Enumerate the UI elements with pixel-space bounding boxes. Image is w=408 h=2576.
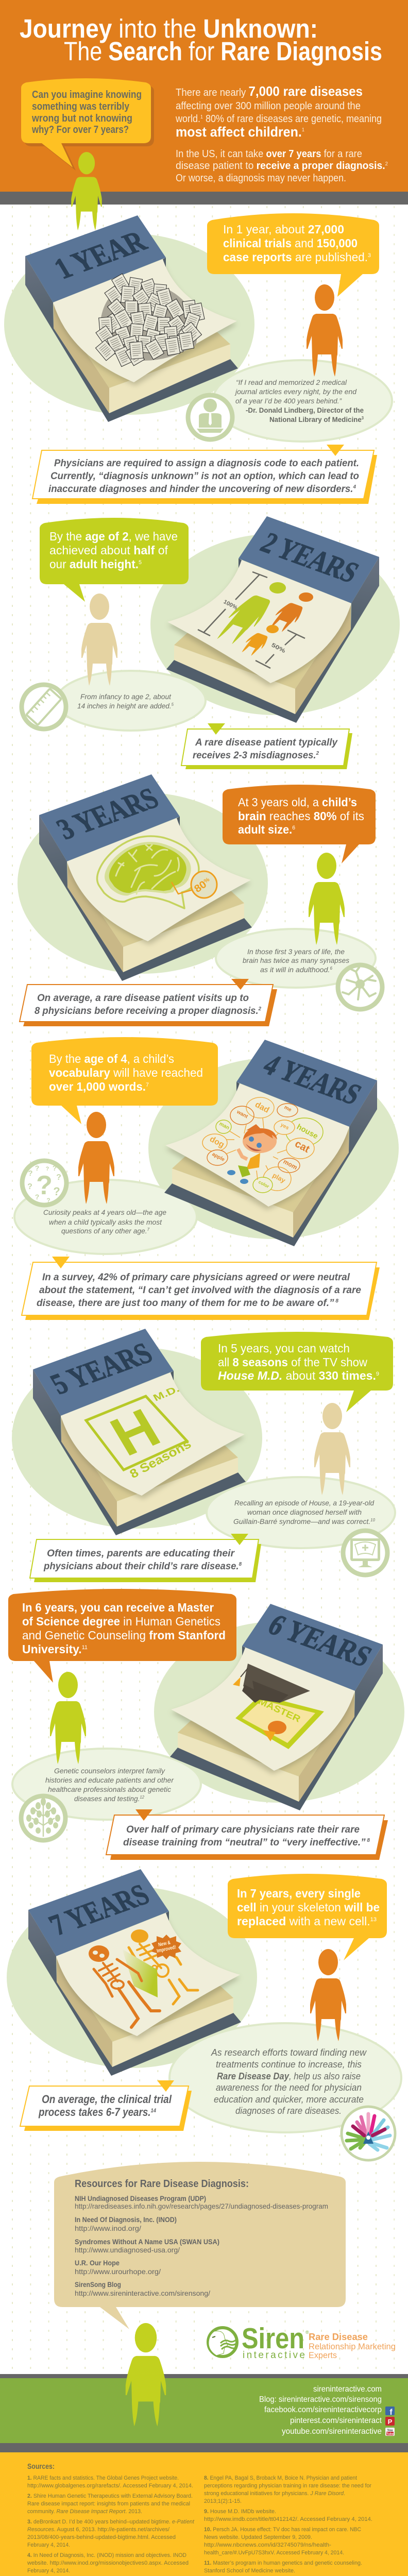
- statement: survey: 8: [334, 1298, 338, 1304]
- speech bubble: clinical trials: case reports are published.: [223, 250, 370, 264]
- statement: rare disease training: [106, 1809, 388, 1860]
- intro speech bubble: something was terribly: [32, 101, 130, 112]
- logo: Siren Interactive: Siren: [242, 2322, 304, 2355]
- footer links: Blog: sireninteractive.com/sirensong: [259, 2395, 382, 2404]
- icon: siren face: [208, 2328, 237, 2357]
- statement: survey: In a survey, 42% of primary care physicians agreed or were neutral: [42, 1272, 350, 1283]
- measure bar: 100%: [198, 572, 305, 668]
- statement: diagnosis code: [32, 445, 377, 504]
- chart: adult vs child height: [198, 572, 313, 668]
- source list: left column: 2. Shire Human Genetic Therapeutics with External Advisory Board.: [27, 2493, 193, 2499]
- source list: right column: 10. Persch JA. House effect: TV doc has real impact on care. NBC: [204, 2527, 361, 2533]
- speech bubble: brain size: brain reaches 80% of its: [238, 809, 364, 823]
- icon: question marks: ?: [53, 1185, 60, 1198]
- circle backdrop: [12, 1347, 262, 1529]
- adult figure: orange: [266, 592, 313, 634]
- statement: rare disease training: 8: [366, 1838, 370, 1843]
- speech bubble: House M.D.: all 8 seasons of the TV show: [218, 1355, 367, 1369]
- icon: House M.D. logo: 8 Seasons: [128, 1437, 194, 1481]
- icon: youtube: You: [387, 2429, 393, 2432]
- callout: Lindberg quote: National Library of Medicine: [269, 415, 366, 423]
- speech bubble: adult height: achieved about half of: [49, 544, 168, 557]
- callout: Rare Disease Day: diagnoses of rare diseases.: [235, 2106, 342, 2116]
- title: The Search for Rare Diagnosis: [64, 37, 382, 66]
- icon: question marks: ?: [36, 1171, 53, 1200]
- section: 7 years: [7, 1869, 401, 2160]
- callout: height gained: 5: [172, 702, 174, 707]
- speech bubble: master of science: 11: [82, 1645, 88, 1651]
- source list: left column: February 4, 2014.: [27, 2568, 70, 2574]
- speech bubble: clinical trials: [207, 213, 379, 297]
- panel: resources: [54, 2162, 346, 2329]
- callout: Lindberg quote: -Dr. Donald Lindberg, Director of the: [246, 406, 364, 414]
- callout: genetic counselors: Genetic counselors interpret family: [54, 1767, 165, 1775]
- callout: curiosity: questions of any other age.: [61, 1227, 148, 1235]
- panel: resources: http://www.sireninteractive.com/sirensong/: [75, 2289, 210, 2297]
- calendar: 1 year: 1 YEAR: [48, 225, 152, 285]
- section: 5 years: [12, 1329, 395, 1582]
- panel: sources: Sources:: [27, 2462, 55, 2471]
- title: Journey into the Unknown:: [20, 14, 318, 43]
- child figure: amber: [239, 625, 279, 657]
- intro statistics text: 80% of rare diseases are genetic, meaning: [203, 113, 382, 125]
- icon: pinterest: P: [388, 2418, 393, 2426]
- callout: House episode: Recalling an episode of House, a 19-year-old: [234, 1499, 375, 1507]
- footer links: [259, 2385, 382, 2436]
- statement: 8 physicians: [20, 979, 277, 1026]
- panel: resources: Syndromes Without A Name USA (SWAN USA): [75, 2238, 219, 2246]
- callout: Lindberg quote: 3: [362, 416, 364, 420]
- statement: parents educating: 8: [239, 1562, 242, 1567]
- statement: parents educating: Often times, parents are educating their: [47, 1548, 235, 1559]
- callout: Rare Disease Day: treatments continue to increase, this: [216, 2059, 362, 2070]
- circle backdrop: [154, 1621, 404, 1803]
- source list: right column: 11. Master’s program in human genetics and genetic counseling.: [204, 2560, 362, 2566]
- skeleton: yellow new and improved: [129, 1929, 198, 2004]
- icon: child with word bubbles: yes: [280, 1122, 290, 1131]
- source list: right column: health_care/#.UvFpU7S3hxV. Accessed February 4, 2014.: [204, 2550, 344, 2556]
- source list: left column: website. http://www.inod.org/missionobjectives0.aspx. Accessed: [27, 2560, 189, 2566]
- callout: genetic counselors: [12, 1749, 201, 1820]
- chart: adult vs child height: 50%: [270, 642, 286, 654]
- speech bubble: master of science: In 6 years, you can receive a Master: [22, 1601, 214, 1614]
- figure: lime person: [50, 1672, 86, 1764]
- icon: child with word bubbles: man: [218, 1121, 230, 1131]
- speech bubble: House M.D.: [201, 1332, 393, 1412]
- speech bubble: vocabulary: 7: [146, 1082, 149, 1088]
- figure: lime person: [309, 853, 345, 945]
- statement: rare disease training: Over half of primary care physicians rate their rare: [126, 1824, 360, 1835]
- intro speech bubble: why? For over 7 years?: [31, 124, 129, 135]
- callout: genetic counselors: 12: [140, 1795, 145, 1800]
- callout: Rare Disease Day: education and quicker, more accurate: [214, 2094, 364, 2105]
- calendar: 1 year: [25, 215, 238, 422]
- footer links: pinterest.com/sireninteract: [290, 2416, 382, 2425]
- intro statistics text: Or worse, a diagnosis may never happen.: [176, 173, 346, 184]
- callout: curiosity: 7: [147, 1227, 150, 1232]
- source list: right column: 2013;1(2):1-15.: [204, 2498, 242, 2504]
- icon: child with word bubbles: play: [271, 1171, 287, 1184]
- intro statistics text: world.: [176, 113, 203, 125]
- source list: right column: [203, 2475, 372, 2576]
- panel: resources: http://rarediseases.info.nih.gov/research/pages/27/undiagnosed-diseases-program: [75, 2202, 328, 2210]
- calendar: 7 years: [28, 1869, 241, 2076]
- source list: left column: Resources. August 6, 2013. http://e-patients.net/archives/: [27, 2527, 169, 2533]
- callout: curiosity: Curiosity peaks at 4 years old—the age: [43, 1208, 166, 1216]
- statement: diagnosis code: Physicians are required to assign a diagnosis code to each patient.: [54, 458, 359, 469]
- callout: Rare Disease Day: awareness for the need for physician: [216, 2082, 362, 2093]
- speech bubble: skeleton cells: In 7 years, every single: [237, 1887, 361, 1900]
- header divider band: [0, 192, 408, 205]
- source list: left column: 2013/08/400-years-behind-updated-bigtime.html. Accessed: [27, 2534, 176, 2540]
- icon: neuron: [338, 965, 382, 1009]
- intro statistics text: 1: [302, 127, 304, 133]
- footer links: facebook.com/sireninteractivecorp: [264, 2405, 382, 2414]
- footer links: sireninteractive.com: [313, 2385, 382, 2394]
- footer links: youtube.com/sireninteractive: [282, 2427, 382, 2436]
- icon: child with word bubbles: dog: [208, 1135, 226, 1149]
- icon: child with word bubbles: [202, 1097, 323, 1193]
- callout: curiosity: [14, 1180, 197, 1254]
- panel: resources: http://www.urourhope.org/: [75, 2267, 161, 2276]
- callout: Rare Disease Day: As research efforts toward finding new: [211, 2047, 367, 2058]
- panel: resources: In Need Of Diagnosis, Inc. (INOD): [75, 2215, 177, 2224]
- callout: synapses: as it will in adulthood.: [260, 965, 329, 974]
- icon: House M.D. logo: [86, 1384, 194, 1481]
- intro speech bubble: Can you imagine knowing: [32, 89, 142, 100]
- calendar: 7 years: 7 YEARS: [43, 1878, 155, 1941]
- title: [20, 14, 382, 66]
- callout: synapses: 6: [330, 966, 333, 971]
- speech bubble: master of science: and Genetic Counseling from Stanford: [22, 1629, 226, 1642]
- panel: resources: U.R. Our Hope: [75, 2259, 120, 2267]
- speech bubble: clinical trials: 3: [368, 252, 371, 259]
- icon: pinterest: [385, 2417, 395, 2426]
- statement: 8 physicians: 2: [258, 1006, 261, 1012]
- speech bubble: brain size: 6: [292, 825, 295, 831]
- speech bubble: House M.D.: 9: [376, 1371, 379, 1377]
- icon: facebook: f: [389, 2408, 393, 2417]
- statement: clinical trial time: process takes 6-7 years.: [39, 2106, 169, 2119]
- callout: genetic counselors: diseases and testing.: [74, 1794, 142, 1803]
- icon: child with word bubbles: mom: [282, 1158, 298, 1171]
- intro statistics text: 1: [200, 114, 203, 120]
- callout: Lindberg quote: [213, 360, 392, 442]
- intro statistics text: 2: [385, 161, 388, 167]
- skeleton: orange: [89, 1945, 160, 2027]
- speech bubble: adult height: our adult height.: [49, 557, 140, 571]
- figure: lime person, intro: [71, 152, 102, 230]
- calendar: 6 years: 6 YEARS: [262, 1608, 378, 1673]
- callout: Rare Disease Day: Rare Disease Day, help us also raise: [217, 2071, 361, 2081]
- speech bubble: master of science: University.: [22, 1642, 82, 1656]
- icon: facebook: [385, 2406, 395, 2417]
- callout: curiosity: when a child typically asks the most: [49, 1218, 162, 1226]
- icon: House M.D. logo: M.D.: [151, 1384, 181, 1403]
- callout: House episode: Guillain-Barré syndrome—and was correct.: [233, 1517, 371, 1526]
- callout: height gained: From infancy to age 2, about: [80, 692, 172, 701]
- icon: child with word bubbles: me: [283, 1105, 293, 1113]
- logo: Siren Interactive: Rare Disease: [309, 2332, 368, 2342]
- icon: tree: [21, 1796, 65, 1840]
- page fold reveal: [122, 1949, 158, 1997]
- intro statistics text: disease patient to receive a proper diagnosis.: [176, 160, 390, 172]
- badge: new and improved: [151, 1935, 181, 1959]
- source list: left column: February 4, 2014.: [27, 2542, 70, 2548]
- intro statistics text: [175, 83, 388, 184]
- callout: height gained: 14 inches in height are added.: [77, 702, 174, 710]
- calendar: 6 years: [170, 1604, 383, 1810]
- source list: left column: 1. RARE facts and statistics. The Global Genes Project website.: [27, 2475, 179, 2481]
- adult figure: lime: [212, 582, 286, 646]
- logo: Siren Interactive: interactive: [243, 2350, 305, 2361]
- source list: left column: 3. deBronkart D. I’d be 400 years behind–updated bigtime. e-Patient: [27, 2519, 195, 2525]
- callout: House episode: [207, 1477, 395, 1548]
- statement: diagnosis code: inaccurate diagnoses and hinder the uncovering of new disorders.: [48, 484, 358, 495]
- section: 3 years: [18, 774, 382, 1026]
- speech bubble: brain size: adult size.: [238, 823, 292, 836]
- panel: resources: NIH Undiagnosed Diseases Program (UDP): [75, 2194, 206, 2202]
- icon: physician reading: [188, 395, 232, 439]
- speech bubble: House M.D.: House M.D. about 330 times.: [218, 1369, 376, 1382]
- calendar: 5 years: [33, 1329, 246, 1535]
- speech bubble: House M.D.: In 5 years, you can watch: [218, 1342, 350, 1355]
- statement: misdiagnoses: A rare disease patient typically: [195, 737, 338, 748]
- intro statistics text: In the US, it can take over 7 years for a rare: [176, 148, 362, 160]
- figure: tan person: [81, 594, 117, 686]
- icon: rare disease day hands: [342, 2107, 395, 2160]
- source list: right column: 9. House M.D. IMDb website.: [204, 2509, 276, 2515]
- speech bubble: vocabulary: over 1,000 words.: [49, 1080, 146, 1093]
- speech bubble: vocabulary: vocabulary will have reached: [49, 1066, 203, 1079]
- icon: question marks: ?: [35, 1193, 39, 1201]
- statement: misdiagnoses: [181, 723, 352, 769]
- source list: right column: 8. Engel PA, Bagal S, Broback M, Boice N. Physician and patient: [204, 2475, 357, 2481]
- source list: right column: strong educational initiatives for physicians. J Rare Disord.: [204, 2490, 345, 2497]
- icon: question marks: [22, 1161, 66, 1205]
- header background: [0, 0, 408, 192]
- statement: clinical trial time: [20, 2080, 192, 2131]
- calendar: 4 years: 4 YEARS: [258, 1048, 367, 1111]
- statement: survey: about the statement, “I can’t get involved with the diagnosis of a rare: [39, 1285, 361, 1296]
- logo: Siren Interactive: Relationship Marketing: [309, 2342, 396, 2351]
- statement: rare disease training: disease training from “neutral” to “very ineffective.”: [123, 1837, 366, 1848]
- icon: graduation cap and diploma: MASTER: [257, 1696, 302, 1724]
- icon: child with word bubbles: want: [235, 1109, 249, 1120]
- circle backdrop: [4, 233, 254, 415]
- speech bubble: skeleton cells: replaced with a new cell.: [237, 1914, 370, 1928]
- panel: resources: SirenSong Blog: [75, 2280, 121, 2289]
- speech bubble: adult height: 5: [139, 560, 142, 566]
- figure: tan person: [314, 1403, 350, 1495]
- speech bubble: clinical trials: clinical trials and 150,000: [223, 236, 358, 250]
- icon: child with word bubbles: dad: [253, 1100, 270, 1115]
- intro statistics text: most affect children.: [176, 124, 302, 140]
- statement: clinical trial time: 14: [151, 2108, 156, 2114]
- icon: House M.D. logo: H: [100, 1397, 170, 1468]
- statement: parents educating: [30, 1534, 261, 1582]
- callout: synapses: brain has twice as many synapses: [243, 956, 349, 964]
- speech bubble: brain size: At 3 years old, a child’s: [238, 795, 357, 809]
- speech bubble: skeleton cells: 13: [370, 1917, 377, 1923]
- source list: left column: community. Rare Disease Impact Report. 2013.: [27, 2509, 142, 2515]
- panel: resources: http://www.inod.org/: [75, 2224, 141, 2232]
- intro speech bubble: wrong but not knowing: [31, 113, 132, 124]
- source list: right column: News website. Updated September 9, 2009.: [204, 2534, 312, 2540]
- section: 1 year: [4, 213, 392, 504]
- circle backdrop: [150, 534, 400, 715]
- logo: Siren Interactive: Experts: [309, 2350, 337, 2360]
- calendar: 2 years: 2 YEARS: [255, 527, 365, 589]
- icon: ruler: [22, 685, 66, 729]
- icon: youtube: [385, 2428, 395, 2436]
- icon: skeletons: [89, 1929, 198, 2027]
- child illustration: [227, 1124, 277, 1184]
- icon: brain 80%: [97, 836, 217, 908]
- speech bubble: skeleton cells: [228, 1874, 387, 1960]
- statement: 8 physicians: 8 physicians before receiving a proper diagnosis.: [35, 1006, 265, 1016]
- callout: genetic counselors: healthcare professionals about genetic: [48, 1785, 171, 1793]
- panel: resources: http://www.undiagnosed-usa.org/: [75, 2246, 180, 2254]
- speech bubble: clinical trials: In 1 year, about 27,000: [223, 223, 344, 236]
- chart: adult vs child height: 100%: [223, 599, 239, 611]
- logo: Siren Interactive: ®: [305, 2330, 309, 2335]
- source list: right column: Stanford School of Medicine website.: [204, 2568, 295, 2574]
- icon: pile of papers: [96, 274, 205, 367]
- calendar: 5 years: 5 YEARS: [45, 1336, 158, 1400]
- icon: youtube: Tube: [386, 2433, 394, 2436]
- callout: Rare Disease Day: [169, 2023, 401, 2132]
- callout: House episode: woman once diagnosed herself with: [247, 1508, 362, 1516]
- icon: question marks: ?: [46, 1197, 50, 1204]
- footer band: green: [0, 2374, 408, 2452]
- source list: left column: http://www.globalgenes.org/rarefacts/. Accessed February 4, 2014.: [27, 2483, 193, 2489]
- calendar: 4 years: [164, 1040, 377, 1246]
- figure: orange person: [78, 1112, 114, 1204]
- statement: misdiagnoses: 2: [316, 751, 319, 756]
- speech bubble: vocabulary: By the age of 4, a child’s: [49, 1052, 174, 1065]
- speech bubble: vocabulary: [31, 1037, 218, 1124]
- circle backdrop: [7, 1887, 257, 2068]
- calendar: 3 years: [39, 774, 252, 981]
- source list: left column: Rare disease impact report: insights from patients and the medical: [27, 2501, 190, 2507]
- source list: left column: [27, 2475, 196, 2576]
- icon: question marks: ?: [53, 1164, 57, 1172]
- callout: genetic counselors: histories and educate patients and other: [45, 1776, 174, 1784]
- panel: resources: Resources for Rare Disease Diagnosis:: [75, 2178, 249, 2190]
- icon: child with word bubbles: color: [258, 1179, 270, 1189]
- callout: synapses: [216, 929, 376, 988]
- statement: diagnosis code: 4: [353, 484, 356, 490]
- source list: right column: http://www.nbcnews.com/id/32745079/ns/health-: [204, 2542, 332, 2548]
- icon: question marks: ?: [56, 1173, 61, 1182]
- speech bubble: master of science: [8, 1589, 236, 1683]
- icon: question marks: ?: [28, 1169, 33, 1178]
- statement: misdiagnoses: receives 2-3 misdiagnoses.: [193, 750, 319, 761]
- intro statistics text: There are nearly 7,000 rare diseases: [176, 83, 363, 99]
- icon: question marks: ?: [46, 1166, 49, 1172]
- section: 4 years: [14, 1037, 399, 1320]
- icon: brain 80%: 80: [192, 879, 208, 895]
- calendar: 2 years: [166, 516, 379, 723]
- section: 6 years: [8, 1589, 404, 1860]
- speech bubble: brain size: [223, 785, 376, 863]
- source list: right column: http://www.imdb.com/title/tt0412142/. Accessed February 4, 2014.: [204, 2516, 372, 2522]
- circle backdrop: [18, 792, 268, 974]
- badge: new and improved: Improved!: [156, 1944, 177, 1954]
- callout: Lindberg quote: of a year I’d be 400 years behind.”: [235, 397, 342, 405]
- intro statistics text: affecting over 300 million people around the: [176, 100, 361, 112]
- icon: child with word bubbles: house: [295, 1123, 319, 1141]
- speech bubble: skeleton cells: cell in your skeleton will be: [237, 1901, 380, 1914]
- icon: question marks: ?: [27, 1182, 32, 1191]
- badge: new and improved: New &: [158, 1940, 171, 1948]
- callout: synapses: In those first 3 years of life, the: [247, 947, 345, 956]
- figure: orange person: [310, 1949, 346, 2041]
- statement: parents educating: physicians about their child’s rare disease.: [44, 1561, 244, 1572]
- callout: Lindberg quote: “If I read and memorized 2 medical: [236, 378, 347, 386]
- panel: sources: [0, 2452, 408, 2576]
- source list: left column: 4. In Need of Diagnosis, Inc. (INOD) mission and objectives. INOD: [27, 2552, 186, 2558]
- section: 2 years: [22, 516, 400, 769]
- statement: 8 physicians: On average, a rare disease patient visits up to: [37, 993, 249, 1004]
- logo: Siren Interactive: [208, 2322, 396, 2361]
- statement: survey: disease, there are just too many of them for me to be aware of.”: [37, 1298, 332, 1309]
- icon: TV monitor: [343, 1531, 387, 1575]
- figure: orange person: [307, 284, 343, 377]
- callout: Lindberg quote: journal articles every night, by the end: [234, 387, 357, 396]
- circle backdrop: [148, 1058, 399, 1239]
- intro speech bubble: [21, 78, 154, 171]
- speech bubble: adult height: [40, 518, 189, 602]
- icon: child with word bubbles: cat: [293, 1138, 312, 1155]
- figure: lime person, footer: [126, 2323, 166, 2426]
- speech bubble: master of science: of Science degree in Human Genetics: [22, 1615, 220, 1628]
- statement: diagnosis code: Currently, “diagnosis unknown” is not an option, which can lead to: [50, 471, 359, 482]
- icon: child with word bubbles: apple: [211, 1151, 226, 1163]
- callout: House episode: 10: [370, 1518, 376, 1522]
- icon: brain 80%: %: [203, 876, 211, 885]
- statement: survey: [22, 1257, 380, 1320]
- calendar: 3 years: 3 YEARS: [51, 782, 164, 845]
- icon: graduation cap and diploma: [233, 1664, 324, 1749]
- statement: clinical trial time: On average, the clinical trial: [42, 2093, 172, 2106]
- source list: right column: perceptions regarding physician training in rare disease: the need for: [204, 2483, 371, 2489]
- callout: height gained: [56, 671, 206, 731]
- icon: question marks: ?: [35, 1164, 39, 1172]
- speech bubble: adult height: By the age of 2, we have: [49, 530, 178, 543]
